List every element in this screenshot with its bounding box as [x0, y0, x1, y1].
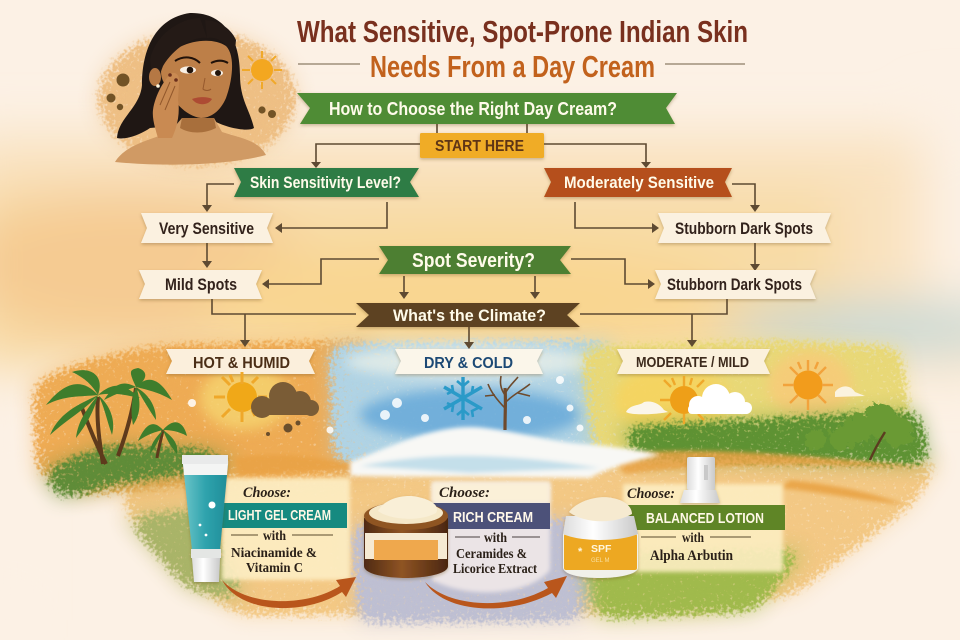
start here box: START HERE	[435, 138, 524, 155]
panel: rich cream: Choose:	[439, 485, 490, 501]
hair back	[117, 13, 254, 138]
icon: hot sun with dark cloud	[214, 372, 319, 436]
hair front parting	[150, 18, 207, 90]
banner: climate	[356, 303, 580, 327]
sand circle	[99, 32, 295, 164]
panel: light gel cream	[222, 478, 350, 580]
banner: how to choose: How to Choose the Right Day Cream?	[329, 99, 617, 119]
box: stubborn dark spots upper: Stubborn Dark Spots	[675, 220, 813, 238]
dune stripes	[235, 451, 930, 505]
banner: spot severity	[379, 246, 571, 274]
box: stubborn dark spots upper	[658, 213, 831, 243]
icon: SPF cream jar: *	[578, 546, 583, 558]
ear	[149, 68, 161, 86]
icon: SPF cream jar: SPF	[591, 543, 612, 555]
label: dry and cold: DRY & COLD	[424, 355, 513, 372]
icon: right sun	[783, 360, 865, 410]
panel: rich cream: Ceramides &	[456, 547, 527, 562]
panel: rich cream: with	[484, 531, 507, 546]
hand on cheek	[153, 73, 179, 138]
label: hot and humid: HOT & HUMID	[193, 355, 290, 372]
arrow: rich to lotion	[425, 576, 567, 608]
box: very sensitive: Very Sensitive	[159, 220, 254, 238]
panel: light gel cream: Niacinamide &	[231, 546, 317, 561]
eyes	[180, 66, 196, 74]
banner: how to choose	[297, 93, 677, 124]
hot zone wash	[34, 342, 372, 494]
box: stubborn dark spots lower: Stubborn Dark Spots	[667, 276, 802, 294]
title: What Sensitive, Spot-Prone Indian Skin	[297, 14, 748, 49]
panel: rich cream: RICH CREAM	[453, 510, 533, 526]
snow flakes	[188, 376, 584, 434]
box: mild spots: Mild Spots	[165, 276, 237, 294]
banner: moderately sensitive	[544, 168, 732, 197]
icon: brown cream jar	[364, 496, 448, 578]
mild zone wash	[582, 342, 912, 455]
panel: balanced lotion: Choose:	[627, 486, 675, 502]
icon: SPF cream jar: GEL M	[591, 558, 609, 564]
panel: balanced lotion: with	[682, 531, 704, 546]
title	[297, 14, 748, 84]
panel: light gel cream: LIGHT GEL CREAM	[228, 508, 331, 524]
box: very sensitive	[141, 213, 273, 243]
flow connector lines	[202, 124, 760, 349]
cold zone wash	[330, 342, 615, 462]
arrow: gel to rich	[222, 577, 356, 608]
snow hills	[350, 427, 660, 478]
label: moderate or mild	[617, 349, 770, 374]
sand ground	[125, 460, 940, 614]
green vegetation	[44, 412, 930, 498]
start here box	[420, 133, 544, 158]
choose label: Choose:	[243, 485, 291, 501]
face	[161, 41, 232, 118]
panel: rich cream: Licorice Extract	[453, 562, 537, 577]
icon: mild sun with cloud	[626, 376, 752, 424]
panel: rich cream	[432, 482, 550, 592]
icon: sun near portrait	[242, 51, 282, 89]
portrait: woman touching cheek	[99, 13, 295, 165]
box: stubborn dark spots lower	[655, 270, 816, 299]
shoulders and chest	[115, 118, 266, 165]
painted climate landscape	[34, 342, 940, 622]
label: moderate or mild: MODERATE / MILD	[636, 354, 749, 371]
icon: green trees	[804, 403, 913, 460]
title: Needs From a Day Cream	[370, 49, 655, 84]
lips	[192, 97, 212, 104]
panel: balanced lotion: BALANCED LOTION	[646, 511, 764, 527]
icon: bare tree	[485, 376, 530, 430]
banner: skin sensitivity: Skin Sensitivity Level?	[250, 173, 401, 192]
label: dry and cold	[395, 349, 543, 374]
banner: moderately sensitive: Moderately Sensitive	[564, 173, 714, 192]
panel: light gel cream: with	[263, 529, 286, 544]
banner: skin sensitivity	[234, 168, 419, 197]
label: hot and humid	[166, 349, 315, 374]
icon: gel tube	[182, 455, 228, 582]
box: mild spots	[139, 270, 262, 299]
panel: balanced lotion: Alpha Arbutin	[650, 548, 733, 564]
panel: light gel cream: Vitamin C	[246, 561, 303, 576]
panel: balanced lotion	[623, 484, 785, 572]
dark spots around portrait	[106, 74, 276, 118]
icon: SPF cream jar	[563, 497, 638, 578]
panel band	[222, 503, 347, 528]
icon: snowflake	[444, 377, 482, 420]
icon: lotion pump	[680, 457, 720, 503]
banner: climate: What's the Climate?	[393, 306, 546, 325]
banner: spot severity: Spot Severity?	[412, 250, 535, 272]
icon: palm trees	[46, 368, 187, 464]
